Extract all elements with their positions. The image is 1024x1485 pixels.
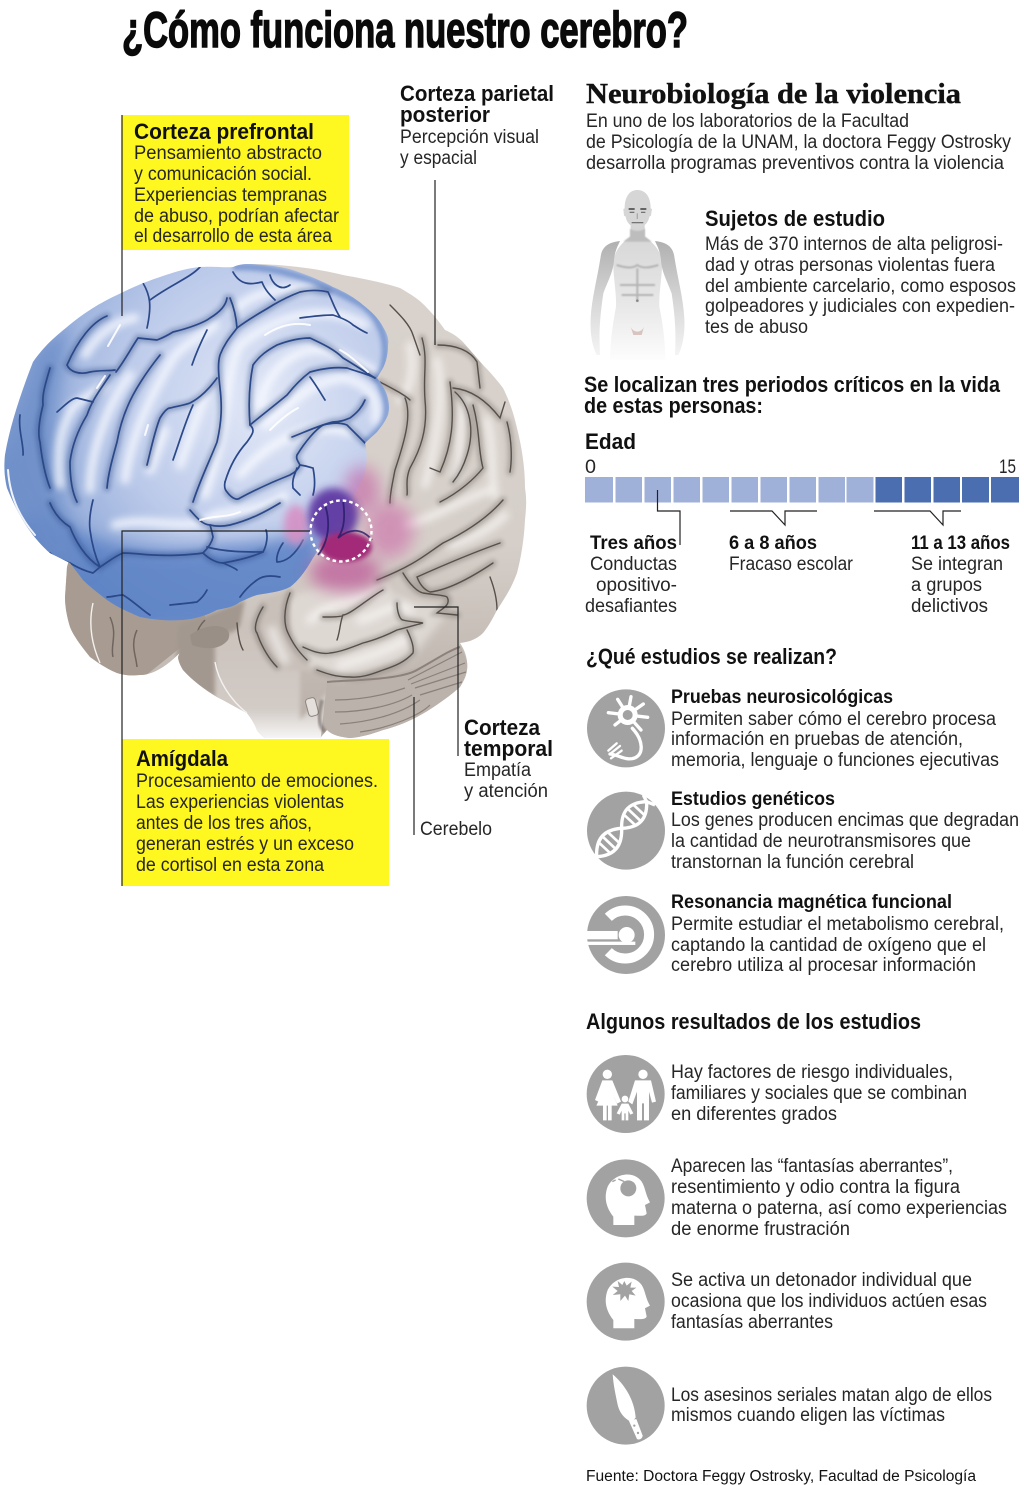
chart: age timeline: Se integran bbox=[911, 554, 1003, 575]
illustration: brain bbox=[0, 255, 540, 745]
chart: age timeline: Conductas bbox=[590, 554, 677, 575]
source note: Fuente: Doctora Feggy Ostrosky, Facultad de Psicología bbox=[586, 1468, 976, 1485]
chart: age timeline: Tres años bbox=[590, 533, 677, 554]
text block: resultado 1: Hay factores de riesgo individuales, bbox=[671, 1062, 953, 1083]
text block: sujetos de estudio: Sujetos de estudio bbox=[705, 206, 885, 231]
panel: amígdala bbox=[122, 531, 389, 886]
label: cerebelo: Cerebelo bbox=[420, 819, 492, 840]
label: corteza temporal bbox=[414, 607, 553, 802]
text block: resultado 3: fantasías aberrantes bbox=[671, 1312, 833, 1333]
text block: genéticos: transtornan la función cerebral bbox=[671, 852, 914, 873]
text block: pruebas: memoria, lenguaje o funciones ejecutivas bbox=[671, 750, 999, 771]
label: corteza temporal: Corteza bbox=[464, 715, 541, 740]
text block: sujetos de estudio: dad y otras personas violentas fuera bbox=[705, 255, 995, 276]
text block: resultado 2: materna o paterna, así como experiencias bbox=[671, 1198, 1007, 1219]
text block: resultado 1: en diferentes grados bbox=[671, 1104, 837, 1125]
text block: sujetos de estudio: golpeadores y judiciales con expedien- bbox=[705, 296, 1015, 317]
chart: age timeline: 15 bbox=[999, 457, 1016, 478]
label: corteza temporal: y atención bbox=[464, 781, 548, 802]
panel: amígdala: Amígdala bbox=[136, 746, 229, 771]
label: corteza temporal: Empatía bbox=[464, 760, 531, 781]
text block: resonancia: Permite estudiar el metabolismo cerebral, bbox=[671, 914, 1004, 935]
illustration: human body bbox=[591, 190, 684, 360]
text block: resultado 2 bbox=[671, 1156, 1007, 1240]
text block: resultado 3 bbox=[671, 1270, 987, 1333]
label: corteza parietal posterior: posterior bbox=[400, 102, 490, 127]
label: corteza parietal posterior: Corteza parietal bbox=[400, 81, 554, 106]
panel: amígdala: generan estrés y un exceso bbox=[136, 834, 354, 855]
text block: intro bbox=[586, 111, 1011, 174]
label: corteza temporal: temporal bbox=[464, 736, 553, 761]
title: ¿Cómo funciona nuestro cerebro? bbox=[122, 2, 688, 58]
heading: qué estudios: ¿Qué estudios se realizan? bbox=[586, 644, 837, 669]
panel: corteza prefrontal bbox=[122, 115, 349, 316]
icon: family bbox=[587, 1055, 665, 1133]
icon: knife bbox=[587, 1367, 665, 1445]
text block: resultado 4: Los asesinos seriales matan algo de ellos bbox=[671, 1385, 992, 1406]
text block: resultado 3: ocasiona que los individuos actúen esas bbox=[671, 1291, 987, 1312]
icon: head with burst bbox=[587, 1263, 665, 1341]
callout circle: amygdala bbox=[310, 500, 372, 562]
text block: sujetos de estudio: tes de abuso bbox=[705, 317, 808, 338]
chart: age timeline: 11 a 13 años bbox=[911, 533, 1010, 554]
panel: amígdala: Las experiencias violentas bbox=[136, 792, 344, 813]
text block: pruebas: Pruebas neurosicológicas bbox=[671, 687, 893, 708]
panel: corteza prefrontal: de abuso, podrían afectar bbox=[134, 206, 340, 227]
highlighted amygdala region in pink and purple bbox=[284, 466, 414, 592]
icon: MRI scanner bbox=[587, 896, 665, 974]
text block: resultado 2: resentimiento y odio contra la figura bbox=[671, 1177, 960, 1198]
panel: amígdala: Procesamiento de emociones. bbox=[136, 771, 378, 792]
text block: resultado 4 bbox=[671, 1385, 992, 1426]
heading: periodos críticos bbox=[584, 372, 1001, 418]
label: corteza parietal posterior bbox=[400, 81, 554, 345]
chart: age timeline bbox=[585, 429, 1019, 617]
panel: corteza prefrontal: el desarrollo de esta área bbox=[134, 226, 332, 247]
chart: age timeline: opositivo- bbox=[596, 575, 677, 596]
text block: pruebas: información en pruebas de atención, bbox=[671, 729, 963, 750]
text block: pruebas bbox=[671, 687, 999, 771]
panel: corteza prefrontal: y comunicación social. bbox=[134, 164, 312, 185]
chart: age timeline: delictivos bbox=[911, 596, 988, 617]
chart: age timeline: 0 bbox=[585, 457, 596, 478]
label: corteza parietal posterior: y espacial bbox=[400, 148, 477, 169]
heading: periodos críticos: de estas personas: bbox=[584, 393, 763, 418]
heading: neurobiología: Neurobiología de la violencia bbox=[586, 79, 961, 110]
icon: neuron bbox=[587, 689, 665, 767]
text block: resultado 1 bbox=[671, 1062, 967, 1125]
text block: sujetos de estudio bbox=[705, 206, 1016, 338]
text block: resonancia: cerebro utiliza al procesar información bbox=[671, 955, 976, 976]
panel: corteza prefrontal: Experiencias tempranas bbox=[134, 185, 327, 206]
blue part: frontal and parietal lobes bbox=[4, 264, 389, 620]
text block: resultado 2: Aparecen las “fantasías aberrantes”, bbox=[671, 1156, 953, 1177]
text block: intro: desarrolla programas preventivos contra la violencia bbox=[586, 153, 1004, 174]
label: corteza parietal posterior: Percepción visual bbox=[400, 127, 539, 148]
chart: age timeline: 6 a 8 años bbox=[729, 533, 817, 554]
text block: resultado 2: de enorme frustración bbox=[671, 1219, 850, 1240]
chart: age timeline: a grupos bbox=[911, 575, 982, 596]
text block: resultado 1: familiares y sociales que se combinan bbox=[671, 1083, 967, 1104]
panel: corteza prefrontal: Pensamiento abstracto bbox=[134, 143, 322, 164]
chart: age timeline: Fracaso escolar bbox=[729, 554, 854, 575]
heading: resultados: Algunos resultados de los estudios bbox=[586, 1009, 921, 1034]
panel: corteza prefrontal: Corteza prefrontal bbox=[134, 119, 314, 144]
panel: amígdala: antes de los tres años, bbox=[136, 813, 312, 834]
text block: genéticos bbox=[671, 789, 1019, 873]
text block: resonancia: Resonancia magnética funcional bbox=[671, 892, 952, 913]
text block: resultado 3: Se activa un detonador individual que bbox=[671, 1270, 972, 1291]
icon: head with bomb bbox=[587, 1159, 665, 1237]
text block: pruebas: Permiten saber cómo el cerebro procesa bbox=[671, 709, 996, 730]
text block: resonancia bbox=[671, 892, 1004, 976]
grey part of the brain bbox=[60, 255, 540, 745]
text block: resultado 4: mismos cuando eligen las víctimas bbox=[671, 1405, 945, 1426]
text block: genéticos: Estudios genéticos bbox=[671, 789, 835, 810]
text block: intro: En uno de los laboratorios de la Facultad bbox=[586, 111, 909, 132]
text block: genéticos: la cantidad de neurotransmisores que bbox=[671, 831, 971, 852]
text block: resonancia: captando la cantidad de oxígeno que el bbox=[671, 935, 986, 956]
chart: age timeline: Edad bbox=[585, 429, 636, 454]
text block: sujetos de estudio: Más de 370 internos de alta peligrosi- bbox=[705, 234, 1003, 255]
icon: DNA bbox=[587, 792, 665, 870]
chart: age timeline: desafiantes bbox=[585, 596, 677, 617]
panel: amígdala: de cortisol en esta zona bbox=[136, 855, 324, 876]
